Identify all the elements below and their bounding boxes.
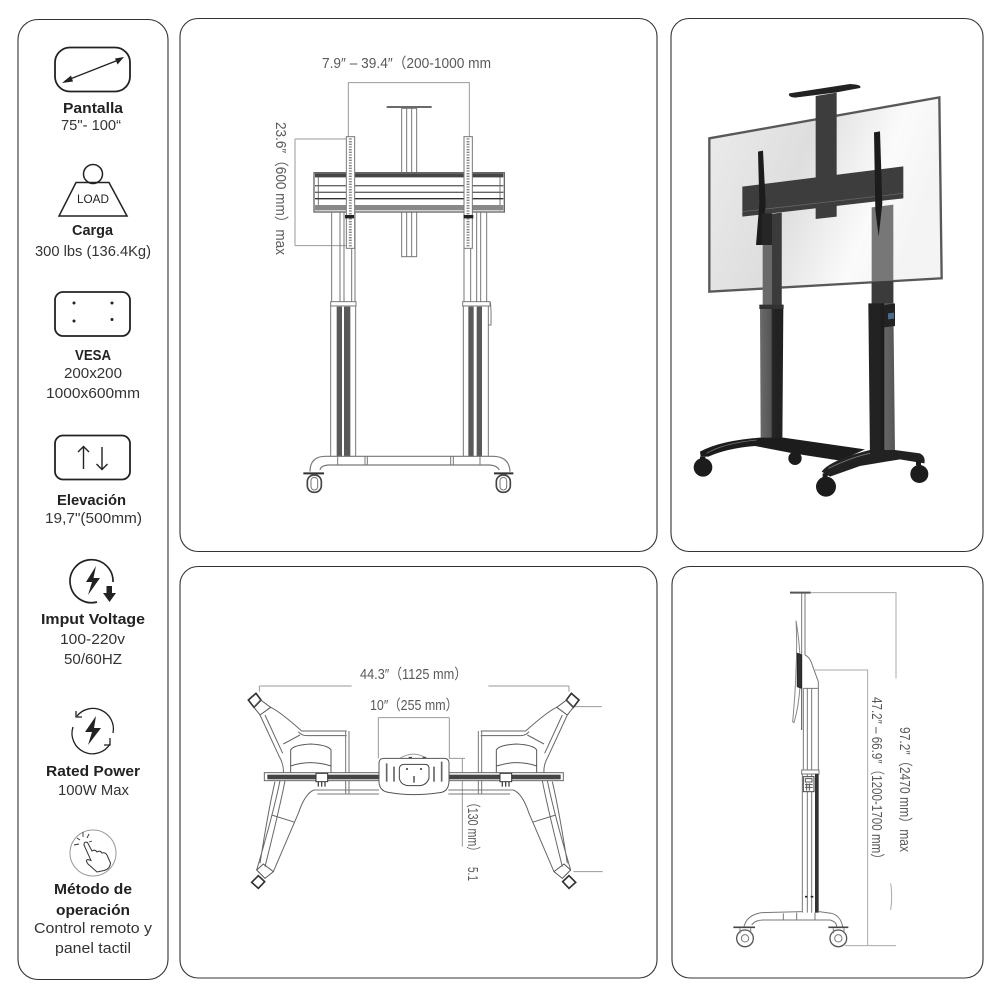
spec: Pantalla: [55, 48, 130, 134]
spec: Pantalla: 75"- 100“: [61, 118, 121, 134]
spec: Imput Voltage: 50/60HZ: [64, 652, 122, 668]
panel: product photo: [671, 18, 983, 552]
spec: Elevación: [45, 436, 142, 527]
spec: Método de operación: [34, 830, 153, 957]
dimension label: height: 23.6″（600 mm）max: [272, 122, 289, 256]
spec: Rated Power: Rated Power: [46, 764, 140, 780]
spec: Carga: [35, 164, 151, 260]
icon: VESA holes: [55, 292, 130, 336]
spec: Carga: Carga: [72, 223, 114, 239]
dimension label: plate height: （130 mm）: [464, 797, 481, 857]
icon: up and down arrows: [55, 436, 130, 480]
icon: power bolt with cycle arrows: [72, 708, 113, 754]
spec: VESA: 200x200: [64, 366, 122, 382]
icon: touch hand: [70, 830, 116, 876]
spec: Imput Voltage: [41, 560, 145, 668]
spec: Pantalla: Pantalla: [63, 101, 124, 117]
dimension label: plate width: 10″（255 mm）: [370, 697, 458, 714]
spec: Método de operación: operación: [56, 903, 130, 919]
icon: voltage bolt with down arrow: [70, 560, 116, 603]
camera shelf and column: [789, 84, 860, 219]
horizontal mounting bar: [742, 166, 903, 217]
spec: Elevación: Elevación: [57, 493, 126, 509]
illustration: black motorised TV stand with screen: [694, 84, 942, 497]
left half: [248, 693, 379, 888]
base frame: [700, 438, 925, 477]
spec: Rated Power: [46, 708, 140, 799]
casters: [694, 452, 928, 497]
spec: Método de operación: Método de: [54, 882, 132, 898]
spec: VESA: [46, 292, 140, 402]
technical drawing: side view: [733, 593, 896, 947]
dimension label: total height: 97.2″（2470 mm）max: [896, 727, 913, 853]
spec: VESA: VESA: [75, 348, 111, 364]
spec: Método de operación: panel tactil: [55, 941, 131, 957]
technical drawing: front view: [295, 83, 513, 492]
spec: Elevación: 19,7"(500mm): [45, 511, 142, 527]
spec: Rated Power: 100W Max: [58, 783, 130, 799]
screen: [709, 97, 942, 292]
dimension label: overall base width: 44.3″（1125 mm）: [360, 666, 467, 683]
dimension label: inches fragment: 5.1: [464, 867, 480, 881]
icon: screen diagonal: [55, 48, 130, 92]
left and right columns: [759, 205, 895, 459]
panel: specifications sidebar: [18, 20, 168, 980]
spec: Carga: 300 lbs (136.4Kg): [35, 244, 151, 260]
spec: VESA: 1000x600mm: [46, 386, 140, 402]
icon: load weight: LOAD: [77, 194, 109, 206]
panel: front view drawing: [180, 18, 657, 552]
VESA rails: [756, 131, 882, 245]
dimension label: screen centre height: 47.2″ – 66.9″（1200-1700 mm）: [868, 697, 885, 865]
spec: Método de operación: Control remoto y: [34, 921, 153, 937]
spec: Imput Voltage: Imput Voltage: [41, 612, 145, 628]
spec: Imput Voltage: 100-220v: [60, 632, 126, 648]
right half: [448, 693, 579, 888]
panel: base top view drawing: [180, 566, 657, 978]
technical drawing: base top view: [248, 686, 603, 888]
dimension label: width: 7.9″ – 39.4″（200-1000 mm: [322, 55, 491, 72]
panel: side view drawing: [672, 566, 983, 978]
